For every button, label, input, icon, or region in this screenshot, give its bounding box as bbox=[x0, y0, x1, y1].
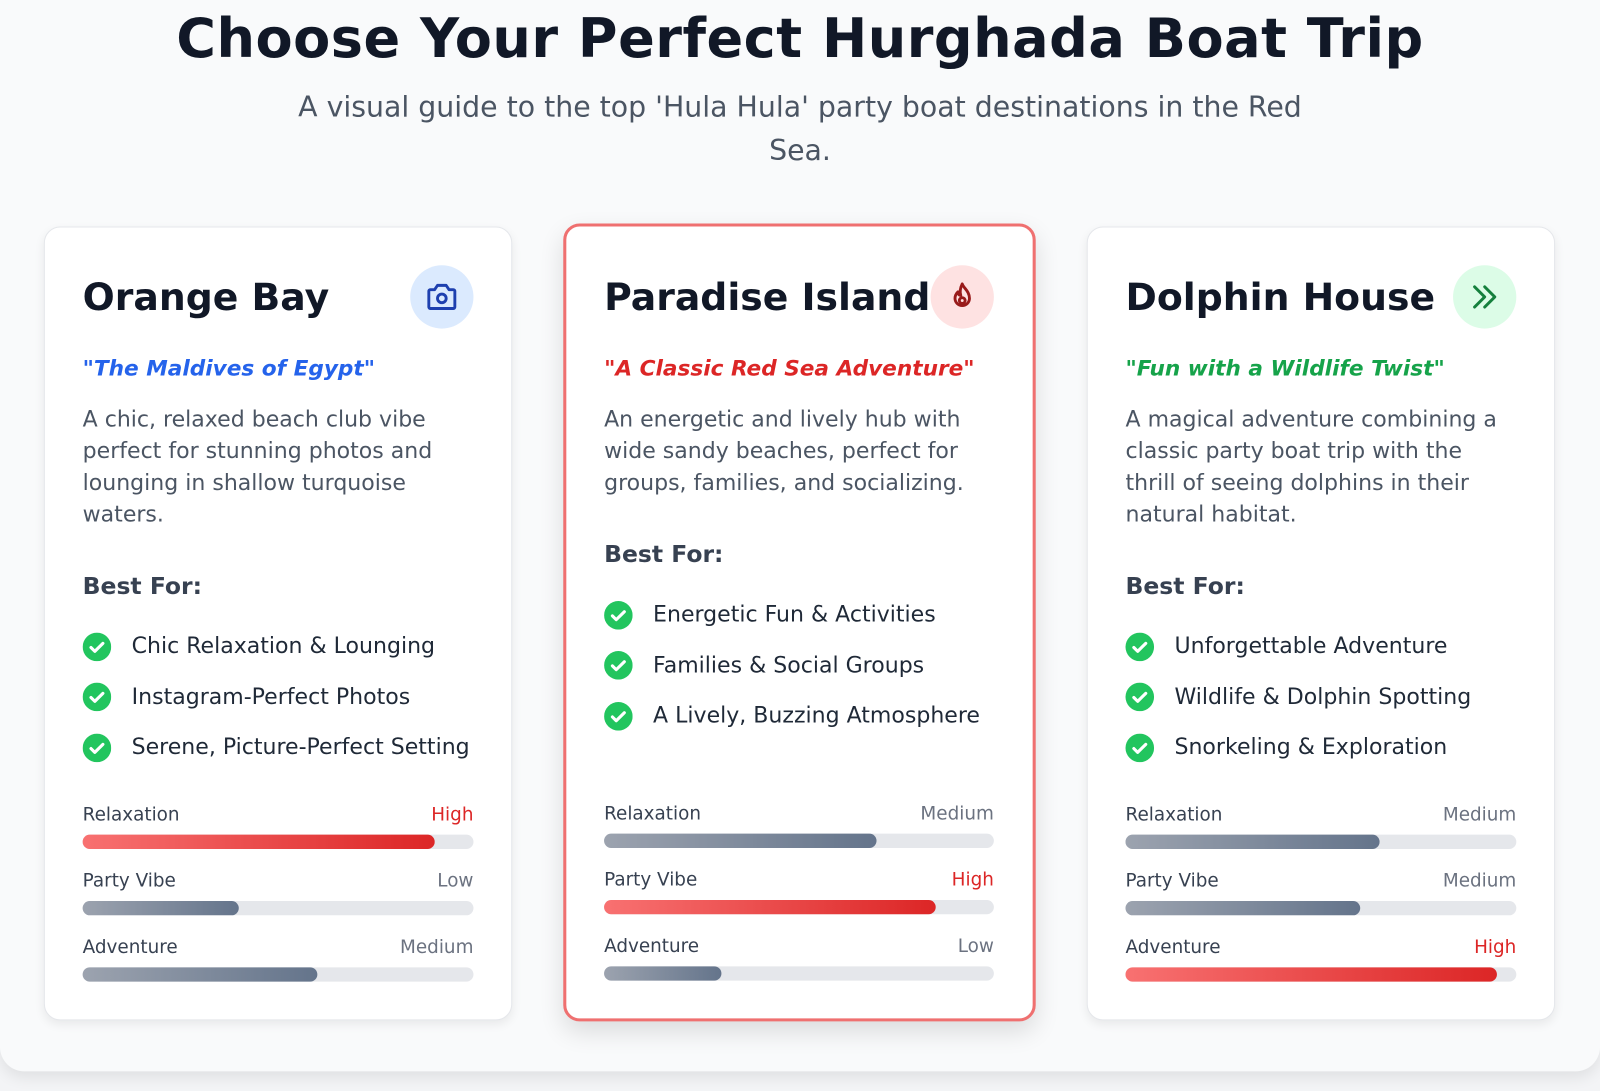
card header bbox=[604, 265, 994, 328]
panel: Paradise Island (highlighted) bbox=[563, 223, 1036, 1021]
subtitle: A visual guide to the top 'Hula Hula' party boat destinations in the Red Sea. bbox=[298, 90, 1302, 167]
panel: Dolphin House bbox=[1087, 227, 1555, 1020]
rating bars: Relaxation bbox=[604, 803, 701, 824]
rating bars: Adventure bbox=[83, 937, 178, 958]
panel: Orange Bay bbox=[44, 227, 512, 1020]
description: A chic, relaxed beach club vibe perfect for stunning photos and lounging in shallow turquoise waters. bbox=[83, 407, 432, 528]
best for list bbox=[1126, 632, 1471, 762]
rating bars: Medium bbox=[1443, 870, 1516, 892]
description: An energetic and lively hub with wide sandy beaches, perfect for groups, families, and socializing. bbox=[604, 407, 964, 496]
best for list bbox=[604, 601, 980, 731]
best for list: Wildlife & Dolphin Spotting bbox=[1174, 684, 1471, 710]
rating bars: Relaxation bbox=[83, 804, 180, 826]
rating bars bbox=[82, 804, 474, 982]
tagline: "A Classic Red Sea Adventure" bbox=[604, 355, 975, 381]
best for heading: Best For: bbox=[604, 542, 723, 568]
card header bbox=[1126, 265, 1516, 328]
rating bars bbox=[604, 803, 994, 981]
best for list bbox=[82, 632, 470, 762]
rating bars: Party Vibe bbox=[604, 869, 697, 891]
rating bars: Party Vibe bbox=[1126, 870, 1219, 892]
rating bars: Relaxation bbox=[1126, 804, 1222, 826]
title: Choose Your Perfect Hurghada Boat Trip bbox=[176, 8, 1424, 70]
tagline: "Fun with a Wildlife Twist" bbox=[1126, 355, 1445, 381]
best for list: A Lively, Buzzing Atmosphere bbox=[653, 703, 980, 729]
card header bbox=[83, 265, 474, 328]
best for list: Unforgettable Adventure bbox=[1174, 634, 1447, 659]
rating bars: Low bbox=[958, 936, 994, 957]
card header: Paradise Island bbox=[604, 275, 930, 319]
best for list: Snorkeling & Exploration bbox=[1174, 735, 1447, 760]
icon: chevrons bbox=[1453, 265, 1516, 329]
description: A magical adventure combining a classic party boat trip with the thrill of seeing dolphins in their natural habitat. bbox=[1126, 407, 1497, 528]
rating bars bbox=[1126, 804, 1516, 982]
best for list: Families & Social Groups bbox=[653, 653, 924, 678]
rating bars: Adventure bbox=[604, 936, 699, 957]
rating bars: High bbox=[1474, 937, 1516, 958]
best for list: Serene, Picture-Perfect Setting bbox=[132, 735, 470, 760]
best for heading: Best For: bbox=[83, 573, 202, 600]
best for list: Chic Relaxation & Lounging bbox=[132, 634, 435, 659]
rating bars: Medium bbox=[1443, 804, 1516, 826]
rating bars: Party Vibe bbox=[83, 870, 176, 892]
best for heading: Best For: bbox=[1126, 573, 1245, 600]
best for list: Instagram-Perfect Photos bbox=[132, 684, 410, 710]
rating bars: Medium bbox=[400, 937, 473, 958]
tagline: "The Maldives of Egypt" bbox=[83, 355, 375, 381]
card header: Orange Bay bbox=[83, 275, 329, 319]
best for list: Energetic Fun & Activities bbox=[653, 602, 936, 628]
rating bars: Medium bbox=[920, 803, 994, 824]
rating bars: Adventure bbox=[1126, 937, 1221, 958]
rating bars: Low bbox=[437, 870, 473, 892]
icon: camera bbox=[410, 265, 473, 329]
rating bars: High bbox=[952, 869, 994, 891]
card header: Dolphin House bbox=[1126, 275, 1435, 319]
icon: flame bbox=[931, 265, 994, 329]
rating bars: High bbox=[431, 804, 473, 826]
